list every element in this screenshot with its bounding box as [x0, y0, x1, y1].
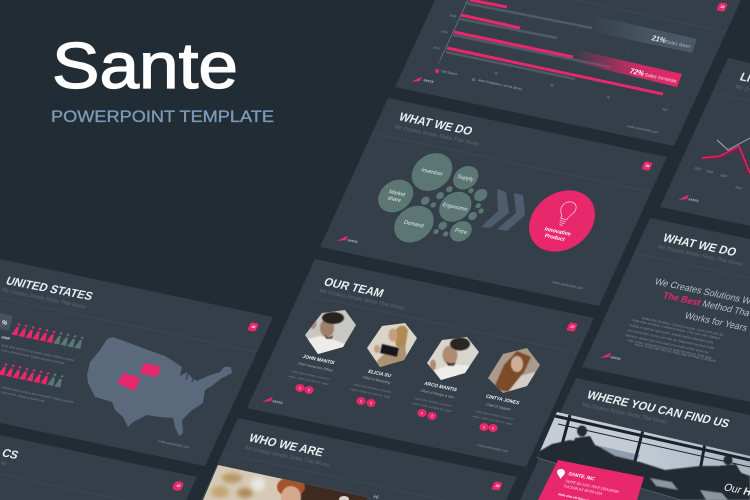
member text: cintya jones: Nulla vitae elit libero a pharetra [475, 409, 514, 421]
photo: woman in cafe [203, 465, 367, 500]
website: www.santeslide.com [477, 443, 509, 453]
line chart: 2007 [694, 166, 702, 171]
member text: arco mantis: Chief of Design & Dev [420, 389, 455, 399]
arrows: chevrons [481, 189, 525, 231]
member text: cintya jones: augue. Donec sed odio dui. Nulla [472, 414, 514, 426]
social icons [295, 384, 314, 394]
paragraph: Nulla vitae elit libero, a pharetra augue. Donec sed odio dui. [642, 316, 725, 337]
icon: map pin [557, 469, 565, 479]
banner: sales increase [573, 50, 682, 87]
member text: arco mantis [411, 381, 459, 413]
social icons: t [299, 386, 301, 390]
social icons [479, 423, 498, 432]
logo [411, 77, 434, 84]
row 1 text: Nulla vitae elit libero a pharetra augue. Integer posuere [1, 343, 75, 362]
website: www.santeslide.com [627, 124, 659, 134]
pictogram row 2 [0, 362, 66, 387]
paragraph: sed consectetur. Donec sed odio dui. Maecenas faucibus mollis [627, 328, 715, 350]
bar chart: 0 [438, 60, 441, 64]
member text: john mantis: JOHN MANTIS [301, 354, 336, 366]
logo [337, 236, 358, 244]
pictogram row 1 [11, 322, 86, 349]
logo: SANTE [610, 355, 621, 361]
line chart: 2010 [735, 185, 743, 190]
member text: cintya jones [472, 394, 521, 426]
website: www.santeslide.com [158, 439, 190, 449]
logo: SANTE [347, 238, 358, 244]
bar chart: 75 [606, 95, 611, 100]
row 2 text: erat a ante. Integer posuere erat. [1, 390, 46, 403]
stat box: % [0, 319, 9, 327]
member text: john mantis: Nulla vitae elit libero a pharetra [291, 369, 330, 381]
line chart: 2008 [706, 169, 714, 174]
icon: light bulb [554, 201, 579, 226]
heading: WHO WE ARE [247, 432, 326, 459]
member text: john mantis [288, 354, 336, 386]
page number: 27 [570, 325, 575, 329]
legend [435, 69, 523, 91]
banner: sales increase: Sales Increase [643, 72, 678, 85]
bar chart: 2012 [433, 45, 441, 50]
logo: SANTE [423, 78, 434, 84]
bar chart: 25 [494, 71, 499, 76]
panel: what we do text slide [582, 218, 750, 402]
page number: 28 [495, 484, 500, 488]
panel: our team slide [247, 259, 594, 467]
social icons [356, 397, 376, 407]
member text: cintya jones: CINTYA JONES [484, 394, 521, 407]
heading: WHAT WE DO [661, 232, 739, 259]
bubble cluster: Invention [420, 168, 444, 178]
member text: elicia su: Nulla vitae elit libero a pharetra [353, 382, 392, 394]
banner: sales down: Sales down [664, 39, 692, 50]
logo [262, 397, 283, 405]
paragraph: augue. Donec sed odio dui. Nulla vitae elit libero a pharetra. [634, 342, 717, 363]
map highlight: south dakota [140, 363, 161, 377]
bubble cluster: Market [388, 189, 407, 198]
bar chart: 50 [550, 83, 555, 88]
page number [491, 481, 503, 491]
member text: arco mantis: ARCO MANTIS [423, 381, 459, 393]
bubble cluster: Ergonomic [441, 202, 469, 213]
member text: arco mantis: Nulla vitae elit libero a pharetra [414, 396, 453, 408]
address card: TUCSON AZ 85705 USA [563, 484, 603, 496]
member text: arco mantis: augue. Donec sed odio dui. Nulla [411, 401, 453, 413]
heading: CS [0, 447, 21, 462]
line chart [694, 138, 750, 190]
photo: airport lounge silhouettes [537, 412, 750, 500]
bubble cluster: Supply [456, 174, 475, 183]
social icons [417, 409, 437, 420]
bubble cluster: share [386, 196, 402, 204]
subheading: ks [0, 460, 8, 467]
map highlight: wyoming [117, 373, 140, 391]
innovative product circle: Product [543, 233, 566, 243]
bubble cluster [361, 145, 504, 254]
page number [641, 161, 653, 171]
legend: Real Competitors, not the old era [478, 78, 523, 91]
page number [171, 481, 185, 491]
website: www.santeslide.com [552, 280, 584, 290]
logo [600, 353, 621, 361]
address card: SUITE 5A-1204 799 E DRAGRAM [565, 479, 619, 494]
subtitle: POWERPOINT TEMPLATE [51, 108, 274, 126]
row 2 text: Integer posuere erat a ante venenatis. Integer posuere [1, 385, 75, 404]
heading: UNITED STATES [4, 275, 95, 303]
member text: cintya jones: Chief of Support [485, 403, 512, 412]
panel: line chart slide [660, 58, 750, 226]
paragraph: Cras mattis consectetur purus sit amet fermentum. Nulla vitae [627, 338, 713, 360]
statement text: Works for Years [683, 310, 750, 333]
page number [566, 322, 578, 332]
heading: OUR TEAM [322, 276, 386, 300]
statement text [653, 276, 750, 333]
innovative product circle [518, 185, 606, 257]
subheading: We Creates Simple Slides That Works [318, 288, 406, 312]
social icons: f [370, 402, 372, 406]
paragraph: facilisis in egestas eget quam. Aenean lacinia bibendum nulla [629, 323, 714, 345]
row 1 text: erat a ante venenatis. Integer posuere erat ante. [1, 348, 66, 365]
address card [538, 460, 644, 500]
paragraph: Nulla vitae elit libero, a pharetra augue. Cras justo odio, dapibus [632, 318, 721, 340]
heading: WHAT WE DO [397, 111, 475, 138]
banner: sales down [590, 16, 697, 53]
member text: john mantis: Chief Interactive Officer [297, 361, 335, 373]
subheading: We Creates Simple Slides That Works [581, 402, 669, 426]
stat box [0, 313, 13, 331]
member text: john mantis: augue. Donec sed odio dui. Nulla [288, 374, 330, 386]
subheading: We Creates Simple Slides That Works [243, 445, 331, 469]
page number: 28 [720, 5, 725, 9]
banner: sales down: 21% [650, 33, 668, 45]
subheading: We Creates Simple Slides That Works [656, 244, 744, 268]
title: Sante [52, 29, 238, 102]
social icons: t [421, 412, 423, 416]
social icons: f [431, 414, 433, 418]
bubble cluster: Demand [402, 220, 425, 230]
member text: elicia su: Chief of Marketing [362, 375, 391, 385]
row 1 text [1, 335, 75, 365]
photo: cintya jones [488, 348, 540, 393]
map: usa [87, 337, 232, 436]
photo: elicia su [367, 323, 417, 367]
logo: SANTE [272, 399, 283, 405]
social icons: t [360, 400, 362, 404]
member text: elicia su: ELICIA SU [367, 369, 392, 379]
bar chart [433, 0, 668, 112]
address card: SANTE, INC [567, 471, 596, 482]
statement text: The Best Method Tha [661, 290, 750, 318]
panel: where you can find us slide [520, 378, 750, 500]
panel: united states map slide [0, 259, 273, 466]
subheading: We Creates Simple Slides That Works [393, 124, 481, 148]
page number [247, 322, 259, 332]
heading: WHERE YOU CAN FIND US [585, 389, 732, 431]
page number: 47 [176, 484, 181, 488]
logo [678, 195, 699, 203]
paragraph: interdum. Nullam quis risus eget urna mollis ornare vel eu leo. [625, 333, 711, 355]
member text: elicia su: augue. Donec sed odio dui. Nulla [350, 387, 392, 399]
panel: statistics slide [0, 435, 197, 500]
subheading: We Creates Simple Slides That Works [0, 287, 88, 311]
banner: sales increase: 72% [628, 66, 646, 78]
logo: SANTE [688, 197, 699, 203]
panel: what we do bubbles slide [320, 98, 667, 306]
legend: Get Started [441, 69, 458, 76]
page number [716, 2, 728, 12]
bubble cluster: Price [454, 228, 468, 236]
panel: who we are slide [200, 418, 517, 500]
bar chart: 2010 [441, 29, 449, 34]
page number: 46 [251, 325, 256, 329]
paragraph [625, 316, 725, 363]
social icons: f [492, 426, 494, 430]
innovative product circle: Innovative [543, 227, 572, 238]
bar chart: 100 [662, 107, 668, 112]
photo: john mantis [305, 310, 356, 354]
page number: 26 [645, 164, 650, 168]
photo: arco mantis [427, 337, 479, 380]
panel: sales bar chart slide [395, 0, 741, 146]
row 1 text: USER [1, 335, 11, 341]
social icons: t [483, 426, 485, 430]
bar chart: 2008 [449, 13, 457, 18]
line chart: 2009 [720, 173, 728, 178]
member text: elicia su [350, 369, 392, 399]
social icons: f [308, 388, 310, 392]
